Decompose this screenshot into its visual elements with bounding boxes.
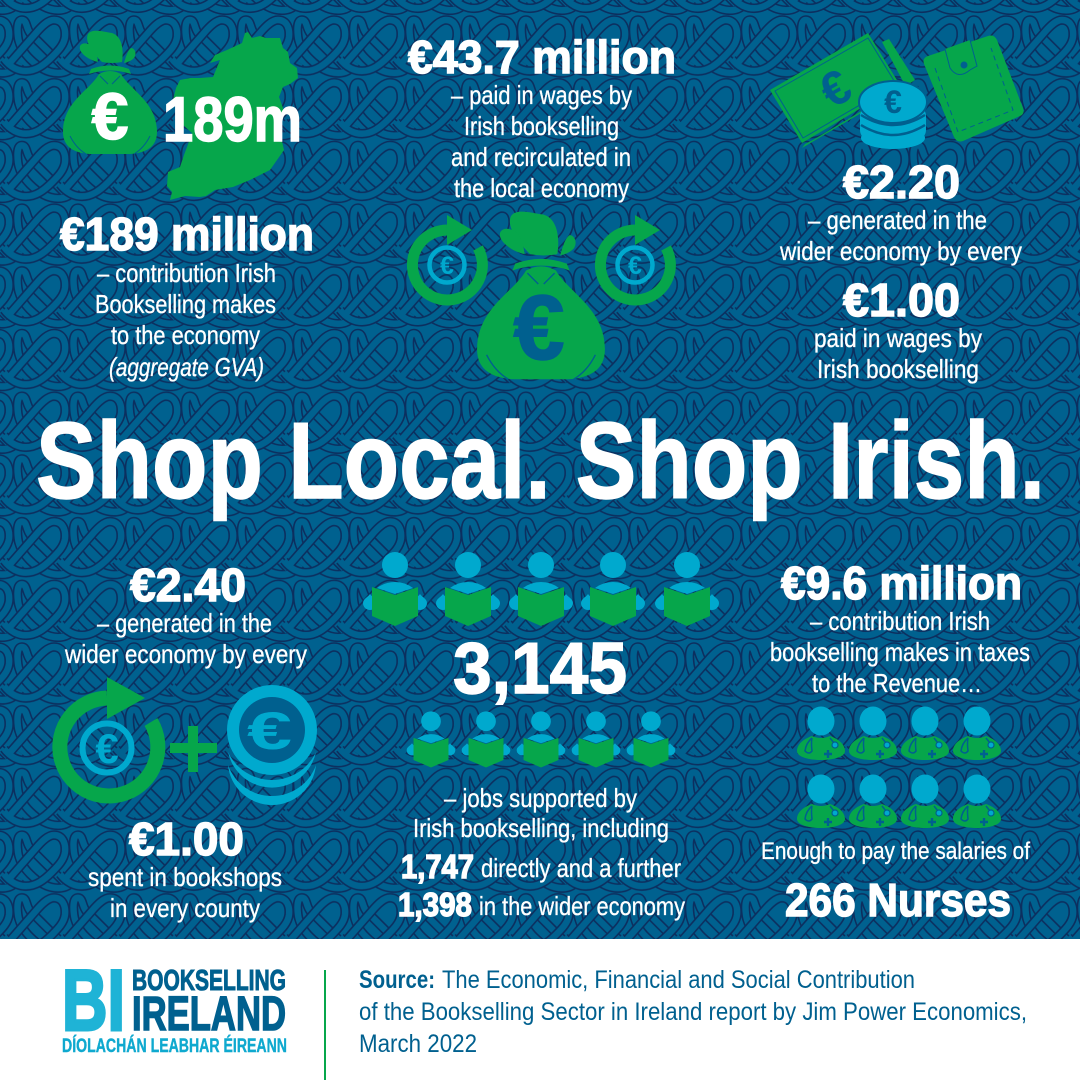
- heading: €189 million: €189 million: [60, 208, 314, 260]
- icon: banknotes: €: [811, 60, 861, 119]
- panel: 2.40 generated: [60, 559, 317, 923]
- text: jobs description: 1,747: [401, 848, 474, 885]
- text: wages description: – paid in wages by: [451, 80, 632, 110]
- text: taxes description: to the Revenue…: [812, 668, 982, 698]
- text: wages description: [451, 80, 632, 203]
- footer panel: [0, 939, 1080, 1080]
- logo: Bookselling Ireland: DÍOLACHÁN LEABHAR ÉIREANN: [62, 1035, 287, 1057]
- icon: money bag: [63, 31, 157, 154]
- heading: €2.20: €2.20: [843, 156, 960, 208]
- text: wages description: and recirculated in: [451, 142, 631, 172]
- text: generated description: – generated in the: [97, 608, 272, 638]
- heading: €9.6 million: €9.6 million: [781, 557, 1022, 609]
- panel: 3,145 jobs: [363, 552, 719, 923]
- text: generated description: – generated in the: [808, 205, 987, 235]
- text: spent in bookshops: [88, 862, 282, 923]
- icon: map of Ireland: [167, 32, 298, 200]
- icons: row of five readers: [363, 552, 719, 626]
- panel: 2.20 generated: [770, 33, 1024, 384]
- panel: 9.6 million taxes: [761, 557, 1030, 926]
- text: taxes description: bookselling makes in taxes: [770, 637, 1030, 667]
- text: source: The Economic, Financial and Social Contribution: [442, 966, 915, 994]
- figure: 266 Nurses: 266 Nurses: [785, 874, 1011, 926]
- icon: coin stack: [859, 81, 927, 149]
- logo: Bookselling Ireland: [62, 953, 287, 1057]
- icon: recirculating euro left: [412, 215, 482, 300]
- text: generated description: wider economy by every: [64, 639, 307, 669]
- text: contribution description: [95, 258, 276, 382]
- text: contribution description: Bookselling makes: [95, 289, 276, 319]
- heading: €1.00: €1.00: [129, 813, 244, 865]
- text: generated description: [64, 608, 307, 669]
- text: jobs description: [398, 783, 685, 923]
- text: paid in wages: Irish bookselling: [817, 354, 979, 384]
- text: jobs description: 1,398: [398, 886, 472, 923]
- heading: €2.40: €2.40: [130, 559, 246, 611]
- text: spent in bookshops: spent in bookshops: [88, 862, 282, 892]
- icon: recirculating euro right: €: [628, 252, 642, 280]
- icon: coin stack: [227, 685, 317, 805]
- icon: money bag: €: [92, 79, 128, 153]
- text: contribution description: (aggregate GVA): [109, 352, 264, 382]
- icon: recirculating euro right: [600, 215, 670, 300]
- text: generated description: [779, 205, 1022, 266]
- text: taxes description: – contribution Irish: [810, 606, 990, 636]
- text: paid in wages: paid in wages by: [814, 323, 982, 353]
- icon: recirculating euro left: €: [440, 252, 454, 280]
- icon: recirculating euro: €: [95, 725, 119, 772]
- text: jobs description: in the wider economy: [479, 891, 685, 921]
- text: source: March 2022: [359, 1030, 477, 1058]
- icon: large money bag: €: [513, 277, 565, 379]
- icon: coin stack: €: [247, 702, 292, 761]
- text: jobs description: directly and a further: [481, 853, 681, 883]
- logo: Bookselling Ireland: BI: [62, 953, 125, 1049]
- logo: Bookselling Ireland: BOOKSELLING: [132, 965, 286, 997]
- logo: Bookselling Ireland: IRELAND: [132, 988, 286, 1041]
- icon: coin stack: €: [884, 84, 902, 120]
- figure: 189m: 189m: [163, 85, 302, 155]
- text: spent in bookshops: in every county: [110, 893, 260, 923]
- panel: 43.7 million wages: [408, 31, 676, 379]
- heading: €1.00: €1.00: [843, 274, 960, 326]
- text: contribution description: to the economy: [111, 320, 260, 350]
- text: jobs description: Irish bookselling, including: [413, 813, 669, 843]
- text: source: Source:: [359, 966, 435, 994]
- icon: large money bag: [477, 212, 605, 379]
- icon: wallet: [924, 36, 1024, 142]
- icons: row of five small readers: [407, 711, 675, 768]
- icon: plus: [170, 726, 217, 772]
- icon: banknotes: [770, 33, 915, 148]
- figure: 3,145: 3,145: [453, 629, 627, 709]
- text: generated description: wider economy by every: [779, 236, 1022, 266]
- icons: eight nurses: [797, 706, 1001, 828]
- text: jobs description: – jobs supported by: [444, 783, 637, 813]
- text: wages description: Irish bookselling: [464, 111, 619, 141]
- text: source: [359, 966, 1027, 1058]
- text: taxes description: [770, 606, 1030, 698]
- text: contribution description: – contribution Irish: [97, 258, 276, 288]
- text: salaries: Enough to pay the salaries of: [761, 838, 1030, 865]
- panel: 189 million contribution: [60, 31, 314, 382]
- text: paid in wages: [814, 323, 982, 384]
- text: wages description: the local economy: [454, 173, 629, 203]
- icon: recirculating euro: [60, 677, 158, 796]
- heading: €43.7 million: €43.7 million: [408, 31, 676, 83]
